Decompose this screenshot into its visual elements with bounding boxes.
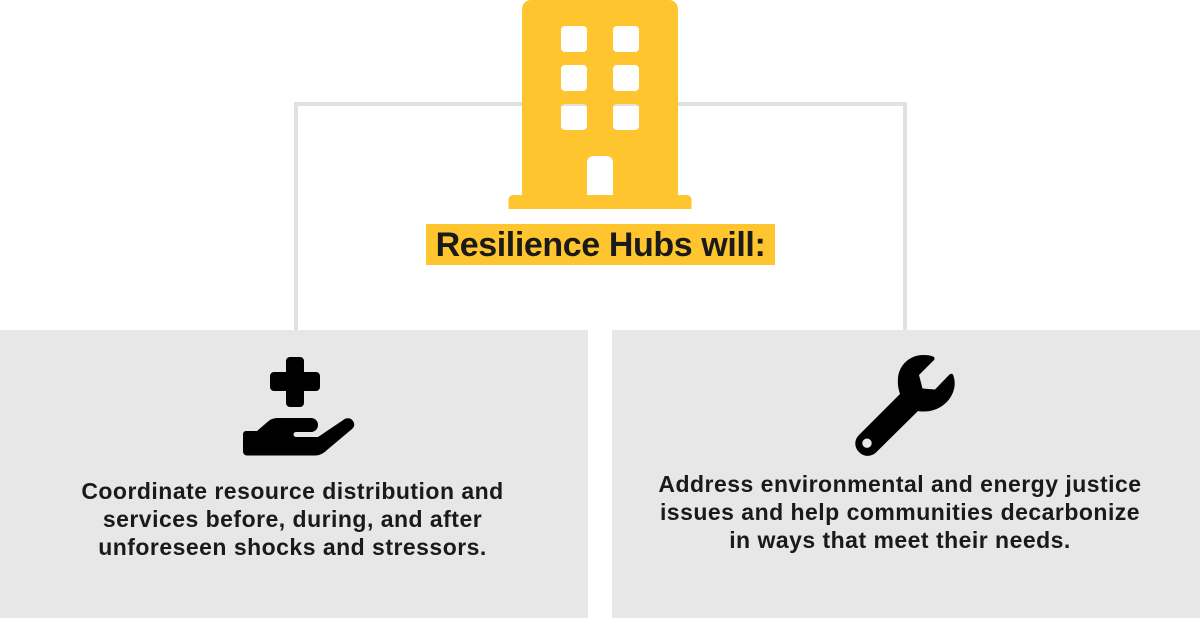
text: environmental justice xyxy=(658,471,1142,553)
text: coordinate resources: unforeseen shocks and stressors. xyxy=(98,534,487,560)
text: coordinate resources: Coordinate resource distribution and xyxy=(81,478,504,504)
text: coordinate resources xyxy=(81,478,504,560)
icon: hand holding medical cross xyxy=(243,357,354,456)
text: environmental justice: Address environmental and energy justice xyxy=(658,471,1142,497)
panel: environmental justice xyxy=(612,330,1200,618)
heading: Resilience Hubs will: Resilience Hubs will: xyxy=(436,226,765,264)
text: coordinate resources: services before, during, and after xyxy=(103,506,482,532)
text: environmental justice: in ways that meet their needs. xyxy=(729,527,1071,553)
panel: coordinate resources xyxy=(0,330,588,618)
text: environmental justice: issues and help communities decarbonize xyxy=(660,499,1140,525)
icon: building xyxy=(508,0,692,209)
icon: wrench xyxy=(855,355,955,456)
